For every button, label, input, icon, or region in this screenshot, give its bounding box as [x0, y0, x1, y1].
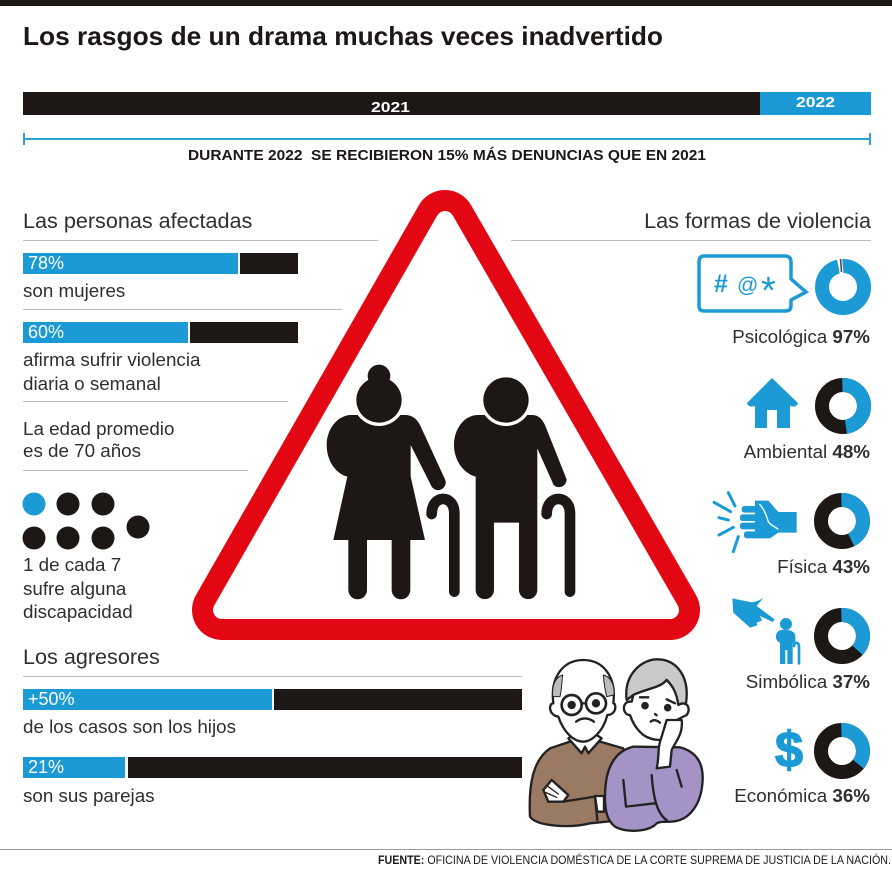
woman: [605, 659, 703, 831]
stat: discapacidad: discapacidad: [23, 601, 133, 622]
icon: house: [747, 378, 798, 428]
subtitle: DURANTE 2022 SE RECIBIERON 15% MÁS DENUNCIAS QUE EN 2021: [188, 147, 706, 164]
stat: +50% hijos: +50%: [28, 689, 75, 709]
label: Ambiental 48%: [744, 441, 870, 462]
icon: fist: [714, 493, 797, 552]
donut: 97%: [822, 259, 864, 308]
title: Los rasgos de un drama muchas veces inadvertido: [23, 21, 663, 51]
panel: las personas afectadas: [22, 208, 378, 622]
stat: 78% mujeres: son mujeres: [23, 280, 125, 301]
form: psicológica: [699, 256, 870, 347]
stat: 60% violencia diaria: 60%: [28, 322, 64, 342]
panel: los agresores: [23, 644, 522, 806]
man: [530, 660, 623, 826]
icon: speech bubble: *: [761, 270, 776, 312]
comparison bar 2021 vs 2022: 2022: [796, 94, 835, 111]
icon: pointing hand and elder: [732, 598, 799, 664]
dots: 1 de cada 7: [22, 492, 150, 550]
stat: +50% hijos: de los casos son los hijos: [23, 716, 236, 737]
stat: 21% parejas: son sus parejas: [23, 785, 155, 806]
heading: personas afectadas: Las personas afectadas: [23, 208, 252, 233]
comparison bar 2021 vs 2022: [23, 92, 871, 116]
form: ambiental: [744, 378, 870, 462]
stat: edad promedio: es de 70 años: [23, 440, 141, 461]
icon: speech bubble: #: [714, 270, 728, 298]
stat: 21% parejas: 21%: [28, 757, 64, 777]
form: económica: [734, 722, 870, 806]
stat: 21% parejas: [23, 757, 522, 806]
icon: speech bubble: @: [737, 274, 758, 297]
comparison bar 2021 vs 2022: 2021: [371, 99, 410, 116]
label: Física 43%: [777, 556, 870, 577]
man silhouette: [454, 374, 570, 599]
stat: 60% violencia diaria: [23, 322, 298, 394]
label: Psicológica 97%: [732, 326, 870, 347]
icon: speech bubble: [699, 256, 806, 312]
stat: discapacidad: 1 de cada 7: [23, 554, 121, 575]
icon: elderly couple silhouettes: [327, 365, 570, 599]
stat: 60% violencia diaria: afirma sufrir violencia: [23, 349, 201, 370]
bracket under bar: [24, 133, 870, 145]
label: Simbólica 37%: [746, 671, 870, 692]
form: simbólica: [732, 598, 870, 692]
donut: 48%: [822, 385, 864, 427]
stat: edad promedio: La edad promedio: [23, 418, 174, 439]
label: Económica 36%: [734, 785, 870, 806]
stat: 78% mujeres: [23, 253, 298, 301]
stat: 60% violencia diaria: diaria o semanal: [23, 373, 161, 394]
stat: +50% hijos: [23, 689, 522, 737]
illustration: worried elderly couple: [530, 659, 703, 831]
panel: las formas de violencia: [511, 208, 872, 806]
form: física: [714, 493, 870, 577]
heading: agresores: Los agresores: [23, 644, 160, 669]
stat: discapacidad: sufre alguna: [23, 578, 127, 599]
donut: 37%: [821, 615, 863, 657]
donut: 36%: [821, 730, 863, 772]
icon: dollar sign: $: [775, 722, 803, 778]
woman silhouette: [327, 365, 454, 599]
stat: 78% mujeres: 78%: [28, 253, 64, 273]
heading: formas de violencia: Las formas de violencia: [644, 208, 872, 233]
donut: 43%: [821, 500, 863, 542]
warning triangle: [222, 220, 670, 610]
